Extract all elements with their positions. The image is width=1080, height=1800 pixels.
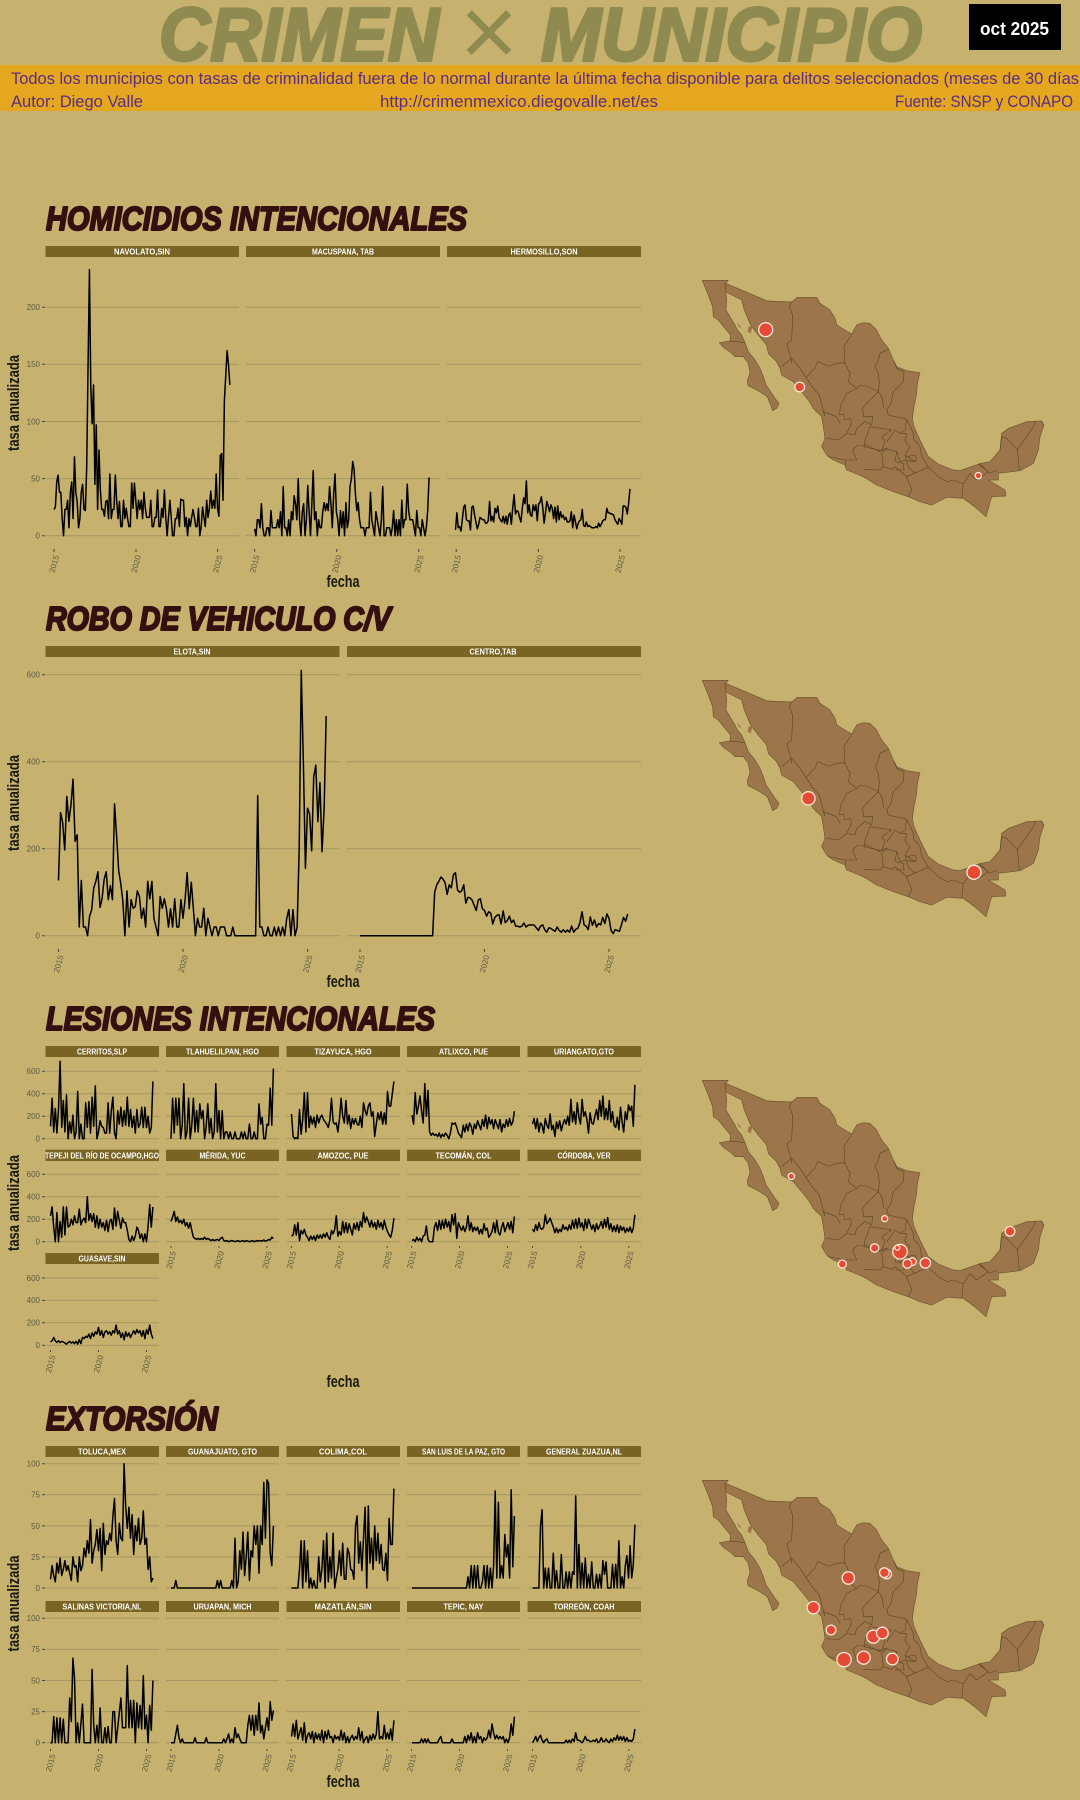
- panel: CORDOBA,VER: 2025: [622, 1250, 636, 1270]
- panel: CENTRO,TAB: 2020: [478, 954, 491, 974]
- y axis ticks: 600: [27, 1067, 41, 1076]
- panel: CENTRO,TAB: CENTRO,TAB: [470, 648, 517, 656]
- section: extorsion: [4, 1400, 641, 1791]
- panel: NAVOLATO,SIN: 2025: [211, 554, 225, 574]
- y axis ticks: 0: [36, 1584, 41, 1593]
- panel: TIZAYUCA,HGO: TIZAYUCA, HGO: [314, 1048, 372, 1056]
- panel: TEPIC,NAY: TEPIC, NAY: [444, 1602, 484, 1612]
- panel: SALINAS VICTORIA,NL: [44, 1601, 159, 1773]
- panel: ELOTA,SIN: 2020: [177, 954, 190, 974]
- y axis ticks: 100: [27, 1460, 41, 1468]
- panel: GUASAVE,SIN: 2025: [140, 1354, 154, 1374]
- panel: HERMOSILLO,SON: 2020: [532, 554, 545, 574]
- panel: TECOMAN,COL: 2025: [501, 1250, 515, 1270]
- panel: CENTRO,TAB: 2015: [354, 954, 367, 974]
- panel: MACUSPANA,TAB: 2025: [412, 554, 426, 574]
- y axis ticks: 0: [36, 1738, 41, 1748]
- y axis ticks: 600: [27, 670, 41, 680]
- panel: CORDOBA,VER: [526, 1150, 641, 1270]
- y axis ticks: 50: [31, 1522, 41, 1531]
- y axis ticks: 600: [27, 1274, 41, 1283]
- y axis ticks: 100: [27, 1614, 41, 1623]
- axis label x: fecha: [326, 1372, 360, 1391]
- panel: URUAPAN,MICH: URUAPAN, MICH: [194, 1602, 252, 1612]
- y axis ticks: 25: [31, 1708, 41, 1716]
- panel: GUASAVE,SIN: GUASAVE,SIN: [78, 1254, 126, 1264]
- panel: ELOTA,SIN: 2015: [52, 954, 66, 974]
- y axis ticks: 200: [27, 844, 41, 854]
- panel: COLIMA,COL: COLIMA,COL: [319, 1448, 367, 1456]
- panel: SALINAS VICTORIA,NL: 2025: [140, 1753, 154, 1773]
- panel: SALINAS VICTORIA,NL: 2020: [92, 1753, 106, 1773]
- panel: CORDOBA,VER: 2020: [574, 1250, 588, 1270]
- panel: MERIDA,YUC: [165, 1150, 279, 1270]
- panel: GENERAL ZUAZUA,NL: [528, 1446, 641, 1588]
- panel: MAZATLAN,SIN: 2020: [333, 1753, 346, 1773]
- panel: TEPEJI DEL RIO DE OCAMPO,HGO: TEPEJI DEL RÍO DE OCAMPO,HGO: [45, 1151, 159, 1160]
- panel: URIANGATO,GTO: [528, 1046, 641, 1139]
- panel: NAVOLATO,SIN: [46, 246, 239, 574]
- y axis ticks: 400: [27, 1090, 41, 1098]
- axis label y: tasa anualizada: [4, 1555, 23, 1652]
- section: robo de vehiculo: [4, 600, 641, 991]
- map: extorsion: [702, 1480, 1044, 1717]
- y axis ticks: 200: [27, 1318, 41, 1328]
- panel: TEPIC,NAY: 2025: [501, 1753, 515, 1773]
- panel: TEPIC,NAY: [405, 1601, 520, 1773]
- panel: HERMOSILLO,SON: HERMOSILLO,SON: [510, 248, 578, 256]
- panel: GUANAJUATO,GTO: [166, 1446, 279, 1588]
- panel: CORDOBA,VER: 2015: [526, 1250, 539, 1270]
- panel: MAZATLAN,SIN: 2015: [285, 1753, 298, 1773]
- heading: extorsion: EXTORSIÓN: [46, 1400, 219, 1437]
- panel: GUASAVE,SIN: 2015: [44, 1354, 58, 1374]
- y axis ticks: 0: [36, 532, 41, 540]
- title: [159, 0, 922, 88]
- heading: robo: ROBO DE VEHICULO C/V: [46, 600, 394, 637]
- y axis ticks: 400: [27, 1192, 41, 1202]
- panel: TLAHUELILPAN,HGO: [166, 1046, 279, 1139]
- panel: TORREON,COAH: 2025: [622, 1753, 636, 1773]
- panel: TEPIC,NAY: 2020: [453, 1753, 467, 1773]
- axis label y: tasa anualizada: [4, 355, 23, 451]
- panel: MACUSPANA,TAB: 2020: [330, 554, 344, 574]
- y axis ticks: 200: [27, 303, 41, 312]
- heading: lesiones: LESIONES INTENCIONALES: [46, 1000, 435, 1037]
- panel: ATLIXCO,PUE: [407, 1046, 520, 1139]
- panel: MERIDA,YUC: 2020: [213, 1250, 226, 1270]
- panel: TEPEJI DEL RIO DE OCAMPO,HGO: [45, 1150, 159, 1242]
- panel: URUAPAN,MICH: [165, 1601, 279, 1773]
- panel: AMOZOC,PUE: 2015: [285, 1250, 298, 1270]
- y axis ticks: 200: [27, 1112, 41, 1121]
- panel: URIANGATO,GTO: URIANGATO,GTO: [554, 1048, 614, 1056]
- section: lesiones intencionales: [4, 1000, 641, 1391]
- y axis ticks: 600: [27, 1170, 41, 1179]
- y axis ticks: 400: [27, 1296, 41, 1305]
- panel: MERIDA,YUC: 2025: [261, 1250, 274, 1270]
- y axis ticks: [27, 1460, 45, 1748]
- panel: CENTRO,TAB: 2025: [603, 954, 616, 974]
- panel: HERMOSILLO,SON: 2025: [614, 554, 627, 574]
- y axis ticks: 50: [31, 474, 41, 484]
- panel: TIZAYUCA,HGO: [286, 1046, 400, 1139]
- y axis ticks: 200: [27, 1215, 41, 1224]
- panel: TEPIC,NAY: 2015: [405, 1753, 419, 1773]
- panel: MACUSPANA,TAB: [246, 246, 440, 574]
- panel: CORDOBA,VER: CÓRDOBA, VER: [558, 1151, 611, 1160]
- panel: URUAPAN,MICH: 2015: [165, 1753, 178, 1773]
- panel: MERIDA,YUC: MÉRIDA, YUC: [200, 1151, 246, 1160]
- panel: ATLIXCO,PUE: ATLIXCO, PUE: [439, 1048, 489, 1056]
- y axis ticks: 75: [31, 1490, 41, 1500]
- panel: NAVOLATO,SIN: 2020: [130, 554, 143, 574]
- panel: AMOZOC,PUE: AMOZOC, PUE: [318, 1151, 369, 1160]
- panel: HERMOSILLO,SON: 2015: [450, 554, 463, 574]
- panel: CERRITOS,SLP: [46, 1046, 159, 1139]
- panel: SALINAS VICTORIA,NL: 2015: [44, 1753, 58, 1773]
- panel: GUASAVE,SIN: [44, 1253, 159, 1374]
- y axis ticks: [27, 670, 45, 940]
- panel: AMOZOC,PUE: 2025: [381, 1250, 394, 1270]
- y axis ticks: 100: [27, 418, 41, 426]
- panel: TLAHUELILPAN,HGO: TLAHUELILPAN, HGO: [186, 1048, 259, 1056]
- date badge: oct 2025: [980, 19, 1049, 39]
- y axis ticks: 150: [27, 360, 41, 369]
- panel: MAZATLAN,SIN: 2025: [381, 1753, 394, 1773]
- map: robo: [702, 680, 1044, 917]
- panel: GUASAVE,SIN: 2020: [92, 1354, 106, 1374]
- panel: TORREON,COAH: [526, 1601, 641, 1773]
- subtitle band: http://crimenmexico.diegovalle.net/es: [380, 92, 658, 111]
- axis label y: tasa anualizada: [4, 1155, 23, 1251]
- axis label x: fecha: [326, 1772, 360, 1791]
- panel: MAZATLAN,SIN: MAZATLÁN,SIN: [314, 1602, 372, 1612]
- panel: CENTRO,TAB: [347, 646, 641, 974]
- section: homicidios intencionales: [4, 200, 641, 591]
- y axis ticks: 25: [31, 1553, 41, 1562]
- panel: ELOTA,SIN: 2025: [301, 954, 315, 974]
- panel: MAZATLAN,SIN: [285, 1601, 400, 1773]
- panel: TECOMAN,COL: 2015: [405, 1250, 419, 1270]
- map: lesiones: [702, 1080, 1044, 1317]
- panel: HERMOSILLO,SON: [447, 246, 641, 574]
- panel: URUAPAN,MICH: 2020: [213, 1753, 226, 1773]
- panel: MERIDA,YUC: 2015: [165, 1250, 178, 1270]
- panel: TOLUCA,MEX: [46, 1446, 159, 1588]
- panel: ELOTA,SIN: [46, 646, 340, 974]
- panel: CERRITOS,SLP: CERRITOS,SLP: [77, 1048, 128, 1056]
- panel: SAN LUIS DE LA PAZ,GTO: [407, 1446, 520, 1588]
- y axis ticks: 0: [36, 932, 41, 940]
- panel: TOLUCA,MEX: TOLUCA,MEX: [78, 1448, 127, 1456]
- panel: TECOMAN,COL: 2020: [453, 1250, 467, 1270]
- panel: TORREON,COAH: 2020: [574, 1753, 588, 1773]
- y axis ticks: [27, 303, 45, 540]
- subtitle band: [0, 65, 1080, 111]
- y axis ticks: 0: [36, 1341, 41, 1350]
- panel: SALINAS VICTORIA,NL: SALINAS VICTORIA,NL: [62, 1602, 142, 1612]
- panel: NAVOLATO,SIN: NAVOLATO,SIN: [114, 248, 170, 256]
- panel: NAVOLATO,SIN: 2015: [48, 554, 61, 574]
- y axis ticks: 0: [36, 1238, 41, 1246]
- y axis ticks: 50: [31, 1676, 41, 1686]
- axis label x: fecha: [326, 972, 360, 991]
- subtitle band: Autor: Diego Valle: [11, 92, 143, 111]
- panel: AMOZOC,PUE: [285, 1150, 400, 1270]
- panel: COLIMA,COL: [286, 1446, 400, 1588]
- axis label y: tasa anualizada: [4, 755, 23, 851]
- panel: TECOMAN,COL: TECOMÁN, COL: [436, 1151, 492, 1160]
- y axis ticks: 75: [31, 1645, 41, 1654]
- panel: MACUSPANA,TAB: 2015: [248, 554, 262, 574]
- y axis ticks: 0: [36, 1134, 41, 1144]
- panel: GENERAL ZUAZUA,NL: GENERAL ZUAZUA,NL: [546, 1448, 622, 1456]
- panel: TORREON,COAH: 2015: [526, 1753, 539, 1773]
- panel: SAN LUIS DE LA PAZ,GTO: SAN LUIS DE LA PAZ, GTO: [422, 1448, 505, 1456]
- panel: TORREON,COAH: TORREÓN, COAH: [554, 1602, 615, 1612]
- panel: URUAPAN,MICH: 2025: [261, 1753, 274, 1773]
- date badge: [969, 4, 1061, 50]
- panel: MACUSPANA,TAB: MACUSPANA, TAB: [312, 248, 374, 256]
- panel: ELOTA,SIN: ELOTA,SIN: [174, 648, 211, 656]
- panel: AMOZOC,PUE: 2020: [333, 1250, 346, 1270]
- heading: homicidios: HOMICIDIOS INTENCIONALES: [46, 200, 467, 237]
- map: homicidios: [702, 280, 1044, 517]
- axis label x: fecha: [326, 572, 360, 591]
- panel: TECOMAN,COL: [405, 1150, 520, 1270]
- y axis ticks: 400: [27, 758, 41, 766]
- panel: GUANAJUATO,GTO: GUANAJUATO, GTO: [188, 1448, 257, 1456]
- y axis ticks: [27, 1067, 45, 1350]
